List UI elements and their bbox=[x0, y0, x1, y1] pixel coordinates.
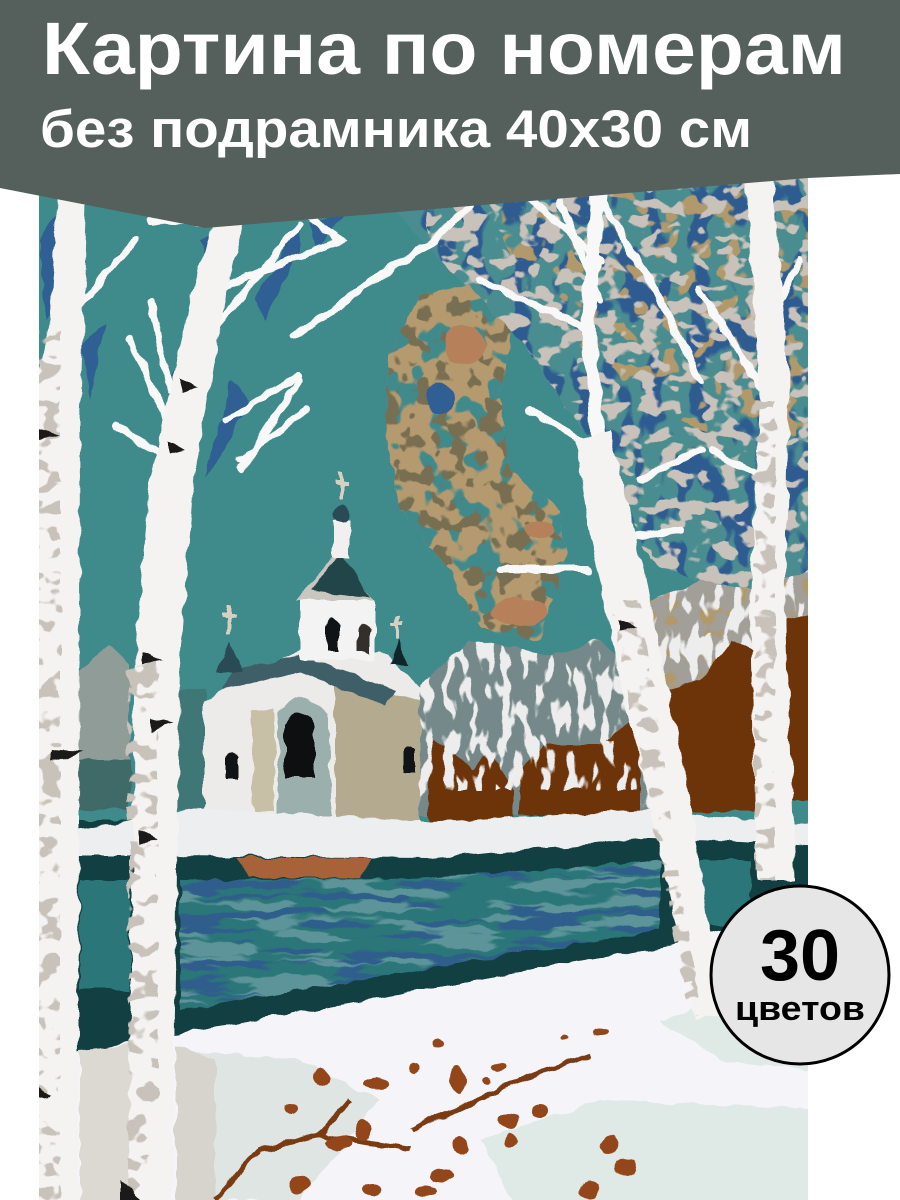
birch branches bbox=[75, 176, 800, 570]
river bbox=[70, 820, 830, 1060]
badge: 30 colours bbox=[711, 886, 889, 1064]
reddish reflection on the river bbox=[236, 858, 370, 878]
snow bank bbox=[75, 808, 830, 858]
distant trees bbox=[78, 560, 830, 822]
title: Картина по номерам bbox=[42, 7, 846, 90]
snow foreground bbox=[76, 930, 808, 1200]
blue streaks around left branches bbox=[40, 210, 345, 478]
painting: winter church landscape bbox=[20, 150, 830, 1200]
badge number: 30 bbox=[760, 916, 840, 996]
church bbox=[204, 472, 420, 822]
autumn tree crown bbox=[385, 285, 565, 640]
header banner bbox=[0, 0, 900, 228]
fallen branch and leaves bbox=[215, 1027, 638, 1200]
subtitle: без подрамника 40х30 см bbox=[40, 100, 752, 159]
sky bbox=[39, 196, 808, 824]
birch bark mottling bbox=[28, 330, 775, 1200]
upper right foliage bbox=[398, 178, 808, 588]
badge label: цветов bbox=[735, 990, 865, 1028]
birch bark marks bbox=[30, 378, 640, 1200]
birch trunks bbox=[28, 170, 795, 1200]
